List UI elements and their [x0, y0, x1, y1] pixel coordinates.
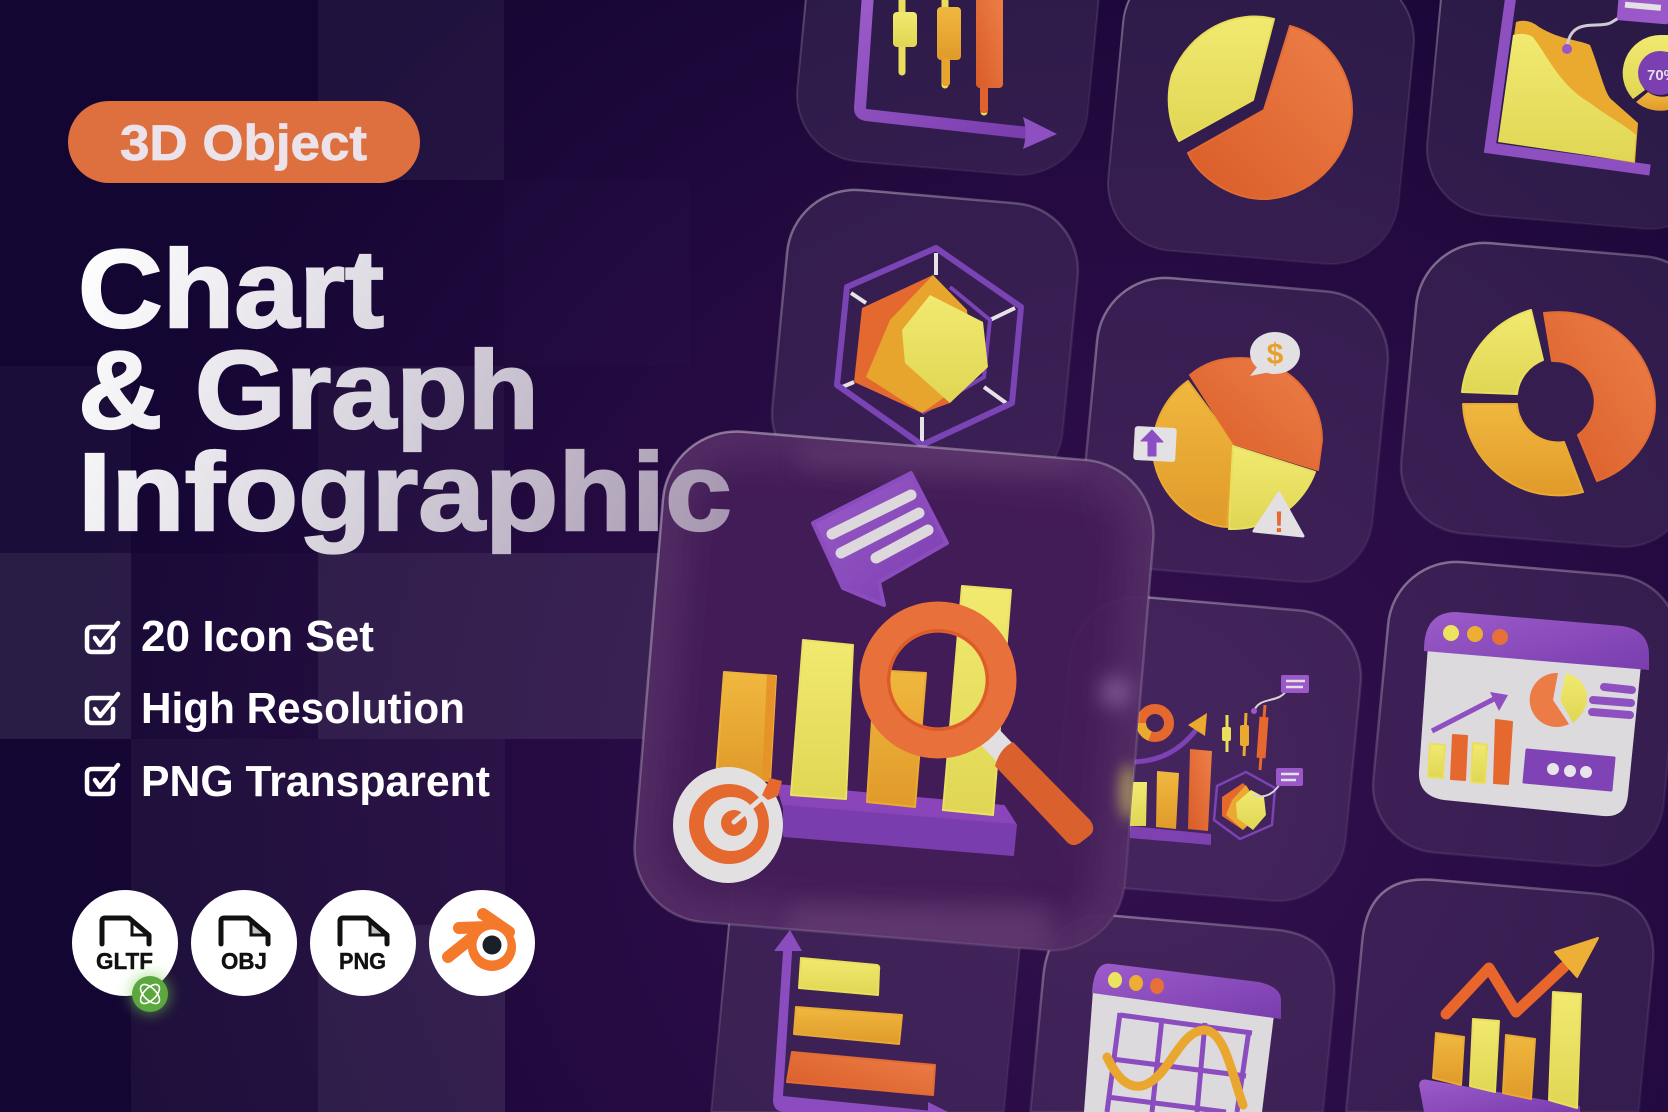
- callout line: [1567, 9, 1629, 48]
- tile: growth bar chart: [1346, 879, 1653, 1112]
- arrow head: [1555, 938, 1598, 977]
- tile: pie chart: [1102, 0, 1420, 270]
- amber slice: [1153, 381, 1233, 527]
- magnifying glass: [875, 617, 1093, 845]
- target with dart: [673, 767, 783, 883]
- amber segment: [1463, 404, 1583, 495]
- window header: [1092, 964, 1281, 1019]
- title: & Graph: [78, 329, 539, 452]
- orange bar: [787, 1052, 935, 1095]
- candles: [1222, 705, 1265, 770]
- axis: [773, 945, 928, 1112]
- window header: [1424, 612, 1649, 670]
- dollar bubble: [1250, 332, 1300, 376]
- format icon: GLTF: GLTF: [96, 948, 153, 974]
- bars: [1428, 720, 1512, 784]
- tile: browser analytics: [1367, 556, 1668, 872]
- inner hexagon: [922, 287, 990, 413]
- format icon: Blender: [429, 890, 535, 996]
- amber candle: [937, 7, 961, 86]
- bar 1: [716, 672, 776, 781]
- candle wicks: [902, 0, 984, 112]
- axis arrow right: [928, 1102, 948, 1112]
- tile: donut chart: [1395, 237, 1668, 553]
- bars: [1130, 749, 1212, 845]
- window body: [1419, 645, 1641, 816]
- yellow candle: [893, 12, 917, 47]
- callout label: [1617, 0, 1668, 25]
- yellow area: [902, 295, 988, 403]
- speech bubble: [813, 473, 947, 605]
- amber area: [866, 275, 973, 413]
- text lines: [1592, 687, 1632, 715]
- glass card: [629, 426, 1159, 956]
- window dots: [1443, 625, 1508, 645]
- warning triangle: [1254, 493, 1303, 539]
- orange candle: [976, 0, 1003, 113]
- tile: browser line chart: [1030, 915, 1334, 1112]
- orange slice: [1188, 26, 1352, 199]
- format icon: GLTF: [72, 890, 178, 996]
- pie: [1530, 673, 1587, 727]
- spokes: [840, 253, 1015, 443]
- orange slice: [1190, 358, 1322, 470]
- tile: horizontal bars: [711, 829, 1023, 1112]
- amber area: [1499, 21, 1638, 163]
- format icon: PNG: PNG: [339, 948, 386, 974]
- outer hexagon: [837, 248, 1021, 445]
- tile: area chart: [1421, 0, 1668, 235]
- callout dot: [1562, 44, 1572, 54]
- bars: [1433, 992, 1581, 1108]
- feature: PNG Transparent: PNG Transparent: [141, 757, 490, 806]
- grid: [1107, 1013, 1252, 1112]
- badge: 3D Object: 3D Object: [120, 115, 367, 171]
- glass card border: [629, 426, 1159, 956]
- zigzag line: [1446, 967, 1564, 1014]
- yellow bar: [799, 958, 879, 995]
- orange area: [854, 275, 973, 413]
- yellow slice: [1169, 17, 1274, 141]
- sine line: [1107, 1030, 1243, 1105]
- base: [1419, 1080, 1580, 1112]
- growth arrow head: [1188, 713, 1207, 736]
- bar 3: [867, 670, 926, 807]
- format icon: OBJ: [191, 890, 297, 996]
- mini donut: [1141, 709, 1169, 737]
- growth arrow line: [1130, 730, 1196, 762]
- format icon: PNG: [310, 890, 416, 996]
- title: Chart: [78, 228, 384, 351]
- title: Infographic: [78, 431, 732, 554]
- tile: candlestick chart: [791, 0, 1109, 181]
- icon: GLTF green badge: [130, 974, 170, 1014]
- base platform: [777, 785, 1016, 855]
- title: [78, 228, 732, 554]
- tile: pie chart with badges: [1076, 272, 1394, 588]
- window dots: [1108, 972, 1164, 994]
- bar 2: [791, 640, 853, 799]
- yellow area: [1498, 34, 1636, 162]
- tile: mini dashboard: [1049, 591, 1367, 907]
- lower callout: [1252, 768, 1303, 796]
- mini radar: [1214, 772, 1275, 839]
- warning triangle: !: [1274, 506, 1284, 539]
- feature: High Resolution: High Resolution: [141, 684, 465, 733]
- button: [1524, 750, 1614, 790]
- axis arrow: [860, 0, 1057, 149]
- feature: 20 Icon Set: 20 Icon Set: [141, 612, 374, 661]
- yellow slice: [1229, 446, 1315, 529]
- orange segment: [1544, 312, 1655, 481]
- trend arrow: [1432, 692, 1508, 731]
- up arrow card: [1133, 426, 1177, 462]
- feature list: [87, 612, 490, 806]
- dollar bubble: $: [1267, 338, 1284, 371]
- bar 4: [943, 586, 1011, 815]
- window body: [1084, 990, 1274, 1112]
- amber bar: [794, 1007, 902, 1044]
- gauge: [1623, 35, 1668, 111]
- tile: radar chart: [766, 184, 1084, 500]
- frame: [1490, 0, 1650, 170]
- format icon: OBJ: OBJ: [221, 948, 267, 974]
- frosted edge highlights: [629, 426, 1159, 956]
- yellow segment: [1462, 310, 1543, 394]
- top callout: [1251, 675, 1309, 714]
- badge: 3D Object: [68, 101, 420, 183]
- axis arrow top: [774, 930, 802, 951]
